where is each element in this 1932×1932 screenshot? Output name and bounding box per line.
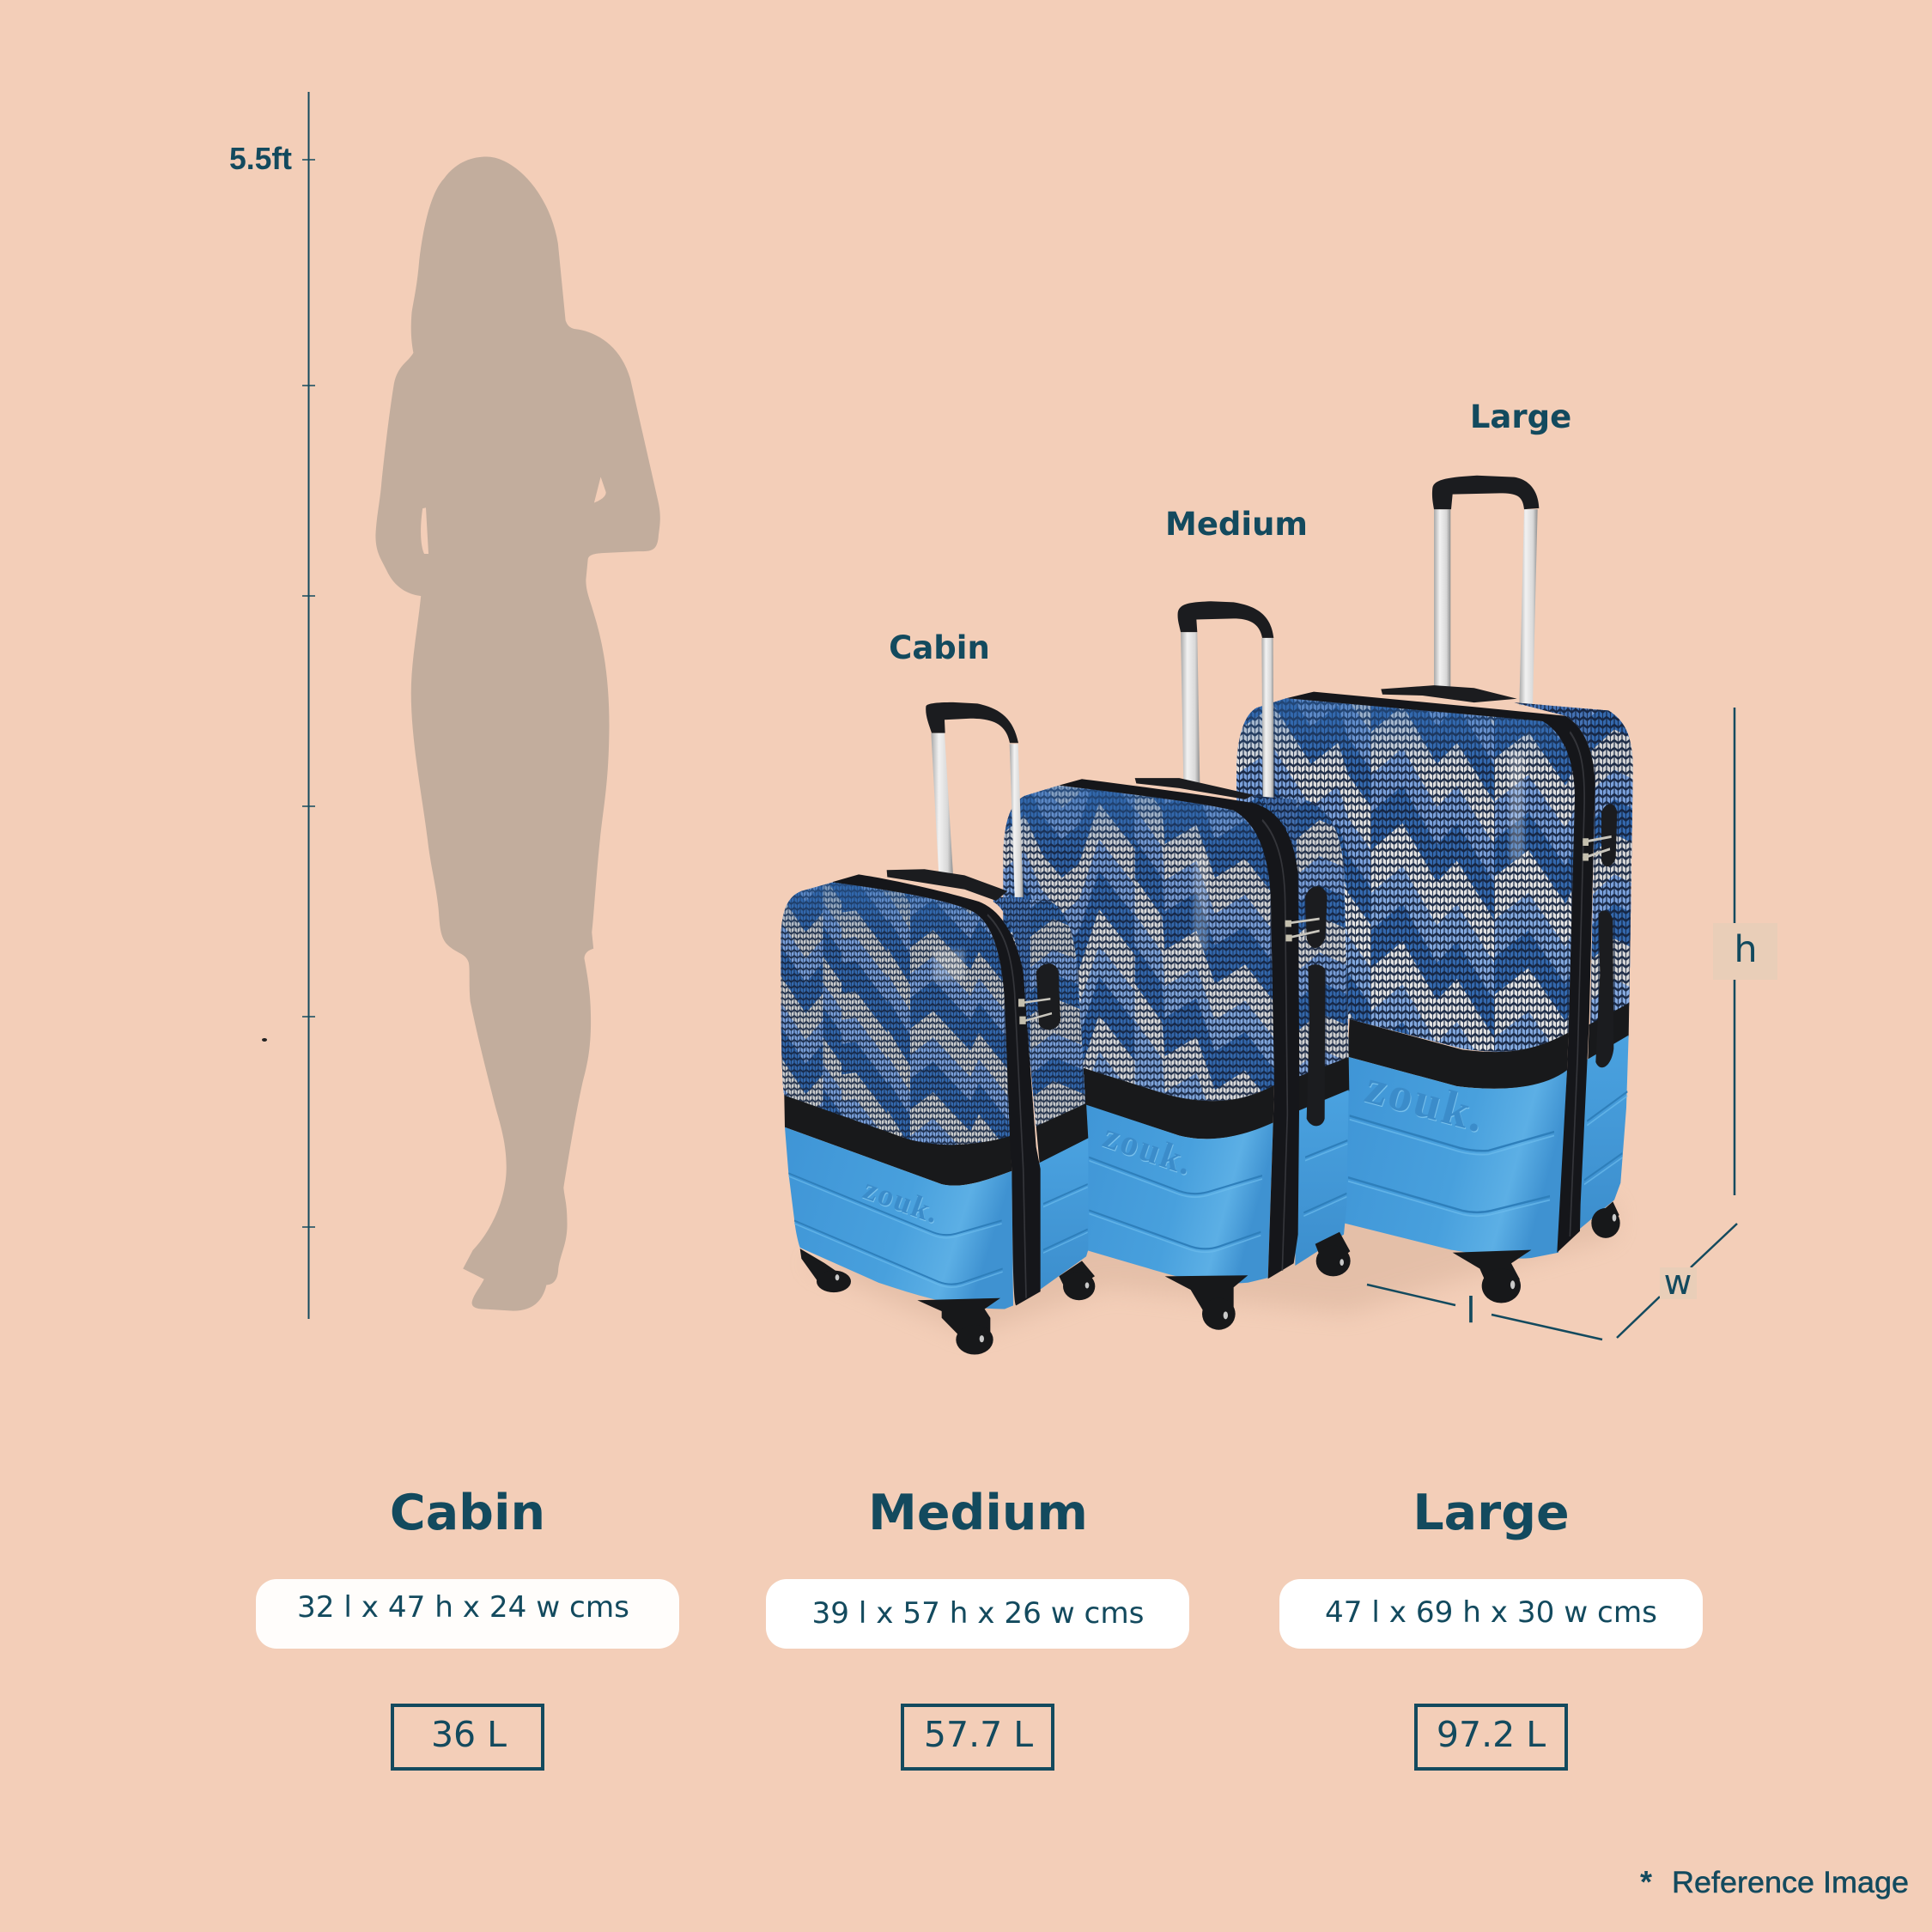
top carry handle: [1381, 685, 1517, 702]
telescopic handle grip: [926, 702, 1018, 743]
telescopic handle poles: [1181, 632, 1273, 799]
top carry handle: [887, 869, 1007, 901]
telescopic handle poles: [1434, 509, 1538, 705]
front panel knit: [1236, 698, 1575, 1052]
side handle: [1307, 964, 1325, 1126]
spec column: cabin: [256, 1485, 679, 1769]
top carry handle: [1135, 778, 1254, 799]
combination lock: [1583, 804, 1617, 866]
capacity box: 36 L: [431, 1714, 507, 1755]
wheels: [1453, 1201, 1620, 1303]
side panel belt and shell: [1036, 1103, 1088, 1292]
height scale: [302, 92, 315, 1319]
woman silhouette: [375, 157, 660, 1311]
embossed logo: cabin: zouk.: [859, 1171, 944, 1230]
front panel knit: [1003, 785, 1274, 1101]
dimensions pill: [256, 1579, 679, 1649]
side panel knit: [1515, 702, 1633, 1024]
spec column: medium: [766, 1485, 1189, 1769]
telescopic handle grip: [1432, 476, 1539, 509]
side handle: [1595, 910, 1613, 1067]
dimensions pill: 39 l x 57 h x 26 w cms: [812, 1596, 1144, 1631]
side panel belt and shell: [1577, 1003, 1629, 1231]
zip strip: [1286, 692, 1595, 1253]
side panel knit: [993, 896, 1085, 1127]
dimension: length: l: [1466, 1290, 1476, 1331]
capacity box: 57.7 L: [924, 1714, 1033, 1755]
suitcase: cabin: [779, 702, 1095, 1616]
front panel knit: [781, 883, 1010, 1145]
suitcase: large: [1228, 476, 1646, 1613]
embossed logo: large: zouk.: [1360, 1060, 1490, 1143]
floor shadows: [803, 1202, 1614, 1335]
telescopic handle grip: [1178, 601, 1273, 638]
suitcase label: medium: Medium: [1165, 506, 1308, 543]
embossed logo: medium: zouk.: [1098, 1116, 1197, 1183]
capacity box: [902, 1705, 1053, 1769]
heading: Cabin: [390, 1485, 545, 1541]
front belt: [1347, 1019, 1569, 1089]
dimensions pill: 32 l x 47 h x 24 w cms: [297, 1590, 629, 1625]
dimensions pill: [1279, 1579, 1703, 1649]
heading: Medium: [868, 1485, 1088, 1541]
wheels: [1165, 1232, 1351, 1330]
dimension: width: w: [1664, 1263, 1692, 1303]
dimensions pill: 47 l x 69 h x 30 w cms: [1325, 1595, 1657, 1630]
telescopic handle poles: [931, 733, 1024, 897]
suitcase label: large: Large: [1470, 398, 1571, 435]
dimension: height: [1713, 708, 1777, 1195]
footnote: *: [1640, 1864, 1652, 1899]
front belt: [1076, 1066, 1274, 1139]
footnote: Reference Image: [1672, 1866, 1909, 1899]
wheels: [800, 1249, 1095, 1355]
side panel knit: [1254, 796, 1349, 1077]
dimension: width: [1617, 1224, 1737, 1338]
combination lock: [1285, 886, 1327, 948]
spec column: large: [1279, 1485, 1703, 1769]
combination lock: [1018, 963, 1060, 1030]
dimensions pill: [766, 1579, 1189, 1649]
capacity box: [1416, 1705, 1566, 1769]
stray dot: [262, 1038, 267, 1042]
zip strip: [833, 874, 1041, 1305]
front hard shell: [1344, 1057, 1567, 1259]
front belt: [784, 1096, 1012, 1186]
front hard shell: [785, 1127, 1013, 1309]
heading: Large: [1413, 1485, 1570, 1541]
front hard shell: [1076, 1102, 1273, 1284]
dimension: height: h: [1734, 928, 1758, 971]
side panel belt and shell: [1295, 1057, 1349, 1266]
capacity box: [392, 1705, 543, 1769]
suitcase label: cabin: Cabin: [889, 629, 990, 666]
height label 5.5ft: 5.5ft: [229, 141, 292, 176]
zip strip: [1059, 779, 1299, 1279]
capacity box: 97.2 L: [1437, 1714, 1546, 1755]
dimension: length: [1367, 1285, 1602, 1340]
suitcase: medium: [996, 601, 1354, 1603]
